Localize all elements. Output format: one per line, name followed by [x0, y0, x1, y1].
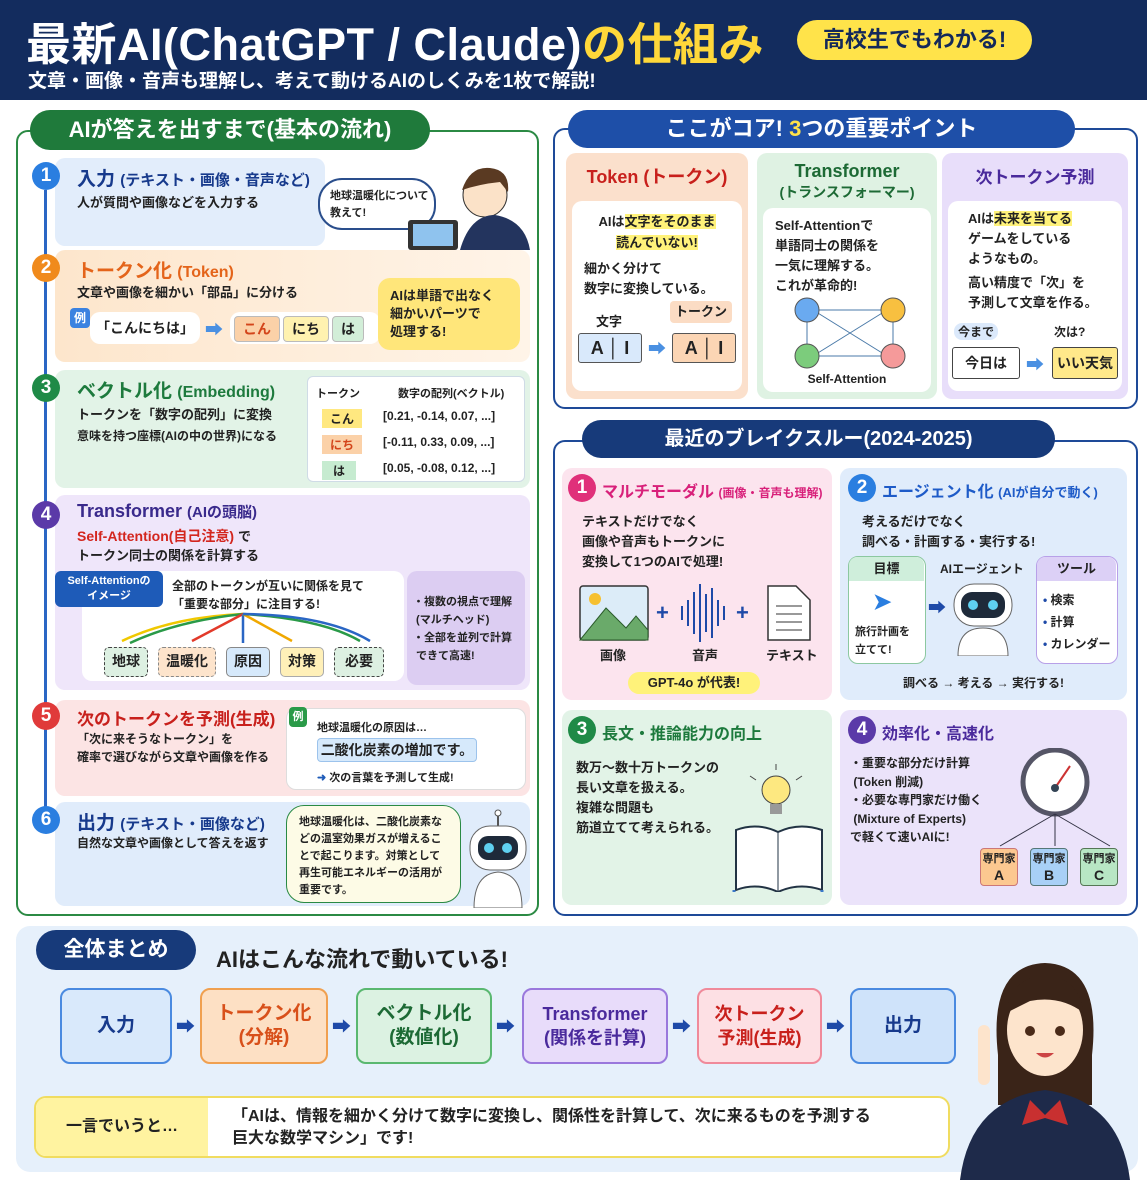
- card: efficiency: (Mixture of Experts): [853, 812, 966, 826]
- flow chart: (関係を計算): [544, 1028, 646, 1048]
- example: prediction: 地球温暖化の原因は…: [317, 722, 427, 734]
- card: multimodal: 画像や音声もトークンに: [582, 534, 725, 549]
- card: multimodal: [562, 468, 832, 700]
- table: vectors: [307, 376, 525, 482]
- card: efficiency: 効率化・高速化: [882, 726, 994, 743]
- card: efficiency: 専門家: [1032, 853, 1066, 865]
- diagram: self-attention: 「重要な部分」に注目する!: [172, 597, 320, 611]
- table: vectors: [0.21, -0.14, 0.07, ...]: [383, 409, 495, 423]
- note: multi-head: ・複数の視点で理解: [413, 596, 512, 608]
- step 4: 4: [41, 504, 51, 525]
- card: long context: 3: [577, 719, 587, 740]
- card: agent: • 検索: [1043, 593, 1075, 607]
- card: efficiency: ・重要な部分だけ計算: [850, 756, 970, 770]
- card: agent: 調べる → 考える → 実行する!: [903, 676, 1064, 690]
- step 2: ➡: [205, 320, 223, 340]
- callout: answer: 地球温暖化は、二酸化炭素などの温室効果ガスが増えることで起こります。対策として再生可能エネルギーの活用が重要です。: [299, 816, 442, 896]
- callout: question: [318, 178, 436, 230]
- card: next token: 高い精度で「次」を: [968, 275, 1085, 290]
- note: multi-head: [407, 571, 525, 685]
- card: next token: 今まで: [958, 325, 994, 339]
- card: efficiency: 専門家: [982, 853, 1016, 865]
- card: transformer: Self-Attention: [808, 372, 886, 386]
- step 6: [32, 802, 530, 906]
- card: next token: AIは未来を当てる: [968, 211, 1072, 226]
- step 2: [32, 250, 530, 362]
- flow chart: ➡: [672, 1017, 691, 1038]
- flow chart: トークン化: [216, 1003, 312, 1024]
- card: agent: ツール: [1057, 561, 1096, 576]
- panel: basic flow: [16, 130, 539, 916]
- card: agent: 目標: [873, 561, 900, 576]
- card: multimodal: マルチモーダル (画像・音声も理解): [602, 484, 822, 501]
- badge: [797, 20, 1032, 60]
- card: efficiency: B: [1044, 867, 1054, 883]
- heading: summary: [36, 930, 196, 970]
- card: next token: ➡: [1026, 355, 1044, 375]
- callout: token note: 処理する!: [390, 324, 446, 339]
- step 1: [32, 158, 325, 246]
- heading: basic flow: AIが答えを出すまで(基本の流れ): [69, 117, 391, 142]
- flow chart: 入力: [97, 1015, 135, 1036]
- card: token: トークン: [675, 304, 727, 319]
- card: token: 文字: [596, 314, 622, 329]
- step 5: 「次に来そうなトークン」を: [77, 732, 233, 746]
- card: transformer: これが革命的!: [775, 278, 857, 293]
- callout: question: 教えて!: [330, 207, 366, 219]
- card: next token: 次トークン予測: [976, 168, 1094, 187]
- step 5: 確率で選びながら文章や画像を作る: [77, 750, 269, 764]
- flow line: [44, 190, 47, 820]
- note: multi-head: できて高速!: [416, 650, 475, 662]
- heading: breakthroughs: [582, 420, 1055, 458]
- flow chart: Transformer: [542, 1004, 648, 1024]
- card: multimodal: +: [656, 600, 669, 625]
- card: multimodal: テキストだけでなく: [582, 514, 699, 529]
- card: next token: 予測して文章を作る。: [968, 295, 1098, 310]
- step 3: 意味を持つ座標(AIの中の世界)になる: [77, 429, 277, 443]
- diagram: self-attention: [82, 571, 404, 681]
- card: token: 細かく分けて: [584, 261, 662, 276]
- card: next token: ゲームをしている: [968, 231, 1071, 246]
- card: efficiency: C: [1094, 867, 1104, 883]
- step 6: 自然な文章や画像として答えを返す: [77, 836, 269, 850]
- step 2: 文章や画像を細かい「部品」に分ける: [77, 285, 298, 300]
- table: vectors: 数字の配列(ベクトル): [398, 388, 504, 400]
- card: next token: いい天気: [1057, 355, 1113, 371]
- card: transformer: Transformer: [794, 161, 900, 181]
- card: agent: • 計算: [1043, 615, 1075, 629]
- card: efficiency: [840, 710, 1127, 905]
- card: next token: ようなもの。: [968, 251, 1046, 266]
- card: multimodal: 1: [577, 477, 587, 498]
- step 4: トークン同士の関係を計算する: [77, 548, 259, 563]
- step 3: ベクトル化 (Embedding): [77, 381, 275, 402]
- card: token: 数字に変換している。: [584, 281, 714, 296]
- panel: summary: [16, 926, 1138, 1172]
- card: transformer: Self-Attentionで: [775, 218, 873, 233]
- callout: token note: 細かいパーツで: [390, 306, 481, 321]
- step 1: 入力 (テキスト・画像・音声など): [77, 169, 310, 190]
- flow chart: ➡: [496, 1017, 515, 1038]
- heading: core points: ここがコア! 3つの重要ポイント: [666, 116, 977, 141]
- diagram: self-attention: 地球: [112, 653, 140, 669]
- quote: one-line summary: 「AIは、情報を細かく分けて数字に変換し、関係性を計算して、次に来るものを予測する: [232, 1108, 871, 1125]
- card: multimodal: 画像: [600, 648, 626, 663]
- table: vectors: にち: [330, 438, 354, 452]
- step 1: 1: [41, 165, 51, 186]
- card: long context: 数万〜数十万トークンの: [576, 760, 719, 775]
- card: agent: ➡: [928, 598, 946, 618]
- badge: 高校生でもわかる!: [823, 27, 1006, 52]
- note: multi-head: (マルチヘッド): [416, 614, 489, 626]
- card: next token: 次は?: [1054, 325, 1085, 339]
- quote: one-line summary: 巨大な数学マシン」です!: [232, 1130, 413, 1147]
- table: vectors: [0.05, -0.08, 0.12, ...]: [383, 461, 495, 475]
- step 4: [32, 495, 530, 690]
- card: long context: 長文・推論能力の向上: [602, 726, 762, 743]
- step 5: [32, 700, 530, 796]
- table: vectors: こん: [330, 412, 354, 426]
- panel: core points: [553, 128, 1138, 409]
- label: self-attention image: Self-Attentionの: [67, 575, 151, 587]
- card: next token: [942, 153, 1128, 399]
- flow chart: (分解): [239, 1027, 289, 1048]
- step 4: Transformer (AIの頭脳): [77, 501, 257, 521]
- callout: answer: [286, 805, 461, 903]
- card: transformer: 一気に理解する。: [775, 258, 879, 273]
- label: self-attention image: [55, 571, 163, 607]
- flow chart: ➡: [176, 1017, 195, 1038]
- card: agent: 調べる・計画する・実行する!: [862, 534, 1035, 549]
- diagram: self-attention: 必要: [345, 653, 373, 669]
- card: agent: 立てて!: [855, 644, 892, 656]
- diagram: self-attention: 原因: [234, 653, 262, 669]
- card: agent: エージェント化 (AIが自分で動く): [882, 484, 1098, 501]
- panel: summary: AIはこんな流れで動いている!: [216, 947, 508, 972]
- card: token: A │ I: [591, 338, 629, 358]
- card: token: 読んでいない!: [616, 235, 698, 250]
- card: multimodal: 音声: [692, 648, 718, 663]
- card: efficiency: 専門家: [1082, 853, 1116, 865]
- card: agent: AIエージェント: [940, 562, 1024, 576]
- flow chart: ➡: [826, 1017, 845, 1038]
- diagram: self-attention: 温暖化: [166, 653, 208, 669]
- heading: breakthroughs: 最近のブレイクスルー(2024-2025): [665, 428, 972, 450]
- table: vectors: [-0.11, 0.33, 0.09, ...]: [383, 435, 494, 449]
- callout: token note: AIは単語で出なく: [390, 288, 494, 303]
- step 2: 例: [74, 311, 86, 325]
- card: token: [566, 153, 748, 399]
- callout: question: 地球温暖化について: [330, 190, 429, 202]
- note: multi-head: ・全部を並列で計算: [413, 632, 512, 644]
- card: token: AIは文字をそのまま: [598, 214, 716, 229]
- flow chart: 次トークン: [714, 1004, 804, 1024]
- step 2: 2: [41, 257, 51, 278]
- card: efficiency: (Token 削減): [853, 774, 923, 788]
- card: long context: 長い文章を扱える。: [576, 780, 693, 795]
- card: transformer: 単語同士の関係を: [775, 238, 879, 253]
- quote: one-line summary: [34, 1096, 950, 1158]
- card: long context: 複雑な問題も: [576, 800, 654, 815]
- card: next token: 今日は: [965, 355, 1007, 371]
- step 4: Self-Attention(自己注意) で: [77, 528, 251, 544]
- example: prediction: ➜ 次の言葉を予測して生成!: [317, 772, 454, 784]
- card: agent: 考えるだけでなく: [862, 514, 966, 529]
- step 2: は: [341, 321, 355, 337]
- step 1: 人が質問や画像などを入力する: [77, 195, 259, 210]
- card: multimodal: GPT-4o が代表!: [648, 675, 740, 690]
- step 6: 出力 (テキスト・画像など): [77, 813, 265, 834]
- card: token: ➡: [648, 339, 666, 359]
- card: transformer: [757, 153, 937, 399]
- table: vectors: は: [333, 464, 345, 478]
- table: vectors: トークン: [316, 388, 360, 400]
- card: long context: [562, 710, 832, 905]
- example: prediction: [286, 708, 526, 790]
- card: efficiency: で軽くて速いAIに!: [850, 830, 950, 844]
- step 2: にち: [292, 321, 320, 337]
- flow chart: ➡: [332, 1017, 351, 1038]
- card: agent: [840, 468, 1127, 700]
- quote: one-line summary: 一言でいうと…: [66, 1118, 178, 1135]
- title: 最新AI(ChatGPT / Claude)の仕組み: [26, 19, 764, 70]
- step 3: [32, 370, 530, 488]
- card: transformer: (トランスフォーマー): [779, 184, 915, 200]
- flow chart: (数値化): [389, 1027, 459, 1048]
- label: self-attention image: イメージ: [87, 590, 131, 602]
- step 5: 5: [41, 705, 51, 726]
- diagram: self-attention: 全部のトークンが互いに関係を見て: [172, 579, 364, 593]
- card: agent: 2: [857, 477, 867, 498]
- flow chart: 出力: [884, 1015, 922, 1036]
- flow chart: 予測(生成): [718, 1028, 802, 1048]
- step 2: こん: [243, 321, 271, 337]
- card: agent: ➤: [873, 589, 891, 614]
- card: efficiency: ・必要な専門家だけ働く: [850, 793, 982, 807]
- card: multimodal: 変換して1つのAIで処理!: [582, 554, 723, 569]
- step 2: 「こんにちは」: [96, 320, 194, 336]
- callout: token note: [378, 278, 520, 350]
- heading: basic flow: [30, 110, 430, 150]
- header: [0, 0, 1147, 100]
- step 2: トークン化 (Token): [77, 261, 234, 282]
- flow chart: [60, 988, 956, 1064]
- heading: summary: 全体まとめ: [64, 938, 168, 961]
- example: prediction: 例: [292, 711, 304, 723]
- diagram: self-attention: 対策: [288, 653, 316, 669]
- heading: core points: [568, 110, 1075, 148]
- card: agent: • カレンダー: [1043, 637, 1111, 651]
- card: multimodal: +: [736, 600, 749, 625]
- step 3: トークンを「数字の配列」に変換: [77, 407, 272, 422]
- card: efficiency: A: [994, 867, 1004, 883]
- step 3: 3: [41, 377, 51, 398]
- icon: robot: [470, 810, 526, 908]
- panel: breakthroughs: [553, 440, 1138, 916]
- card: efficiency: 4: [857, 719, 867, 740]
- step 5: 次のトークンを予測(生成): [77, 710, 275, 729]
- example: prediction: 二酸化炭素の増加です。: [321, 742, 473, 758]
- icon: student girl: [960, 963, 1130, 1180]
- card: multimodal: テキスト: [766, 648, 818, 663]
- card: agent: 旅行計画を: [855, 626, 910, 638]
- subtitle: 文章・画像・音声も理解し、考えて動けるAIのしくみを1枚で解説!: [28, 71, 596, 92]
- card: token: A │ I: [685, 338, 723, 358]
- step 6: 6: [41, 809, 51, 830]
- icon: boy with laptop: [408, 168, 530, 250]
- card: long context: 筋道立てて考えられる。: [576, 820, 719, 835]
- card: token: Token (トークン): [587, 167, 727, 187]
- flow chart: ベクトル化: [376, 1003, 472, 1024]
